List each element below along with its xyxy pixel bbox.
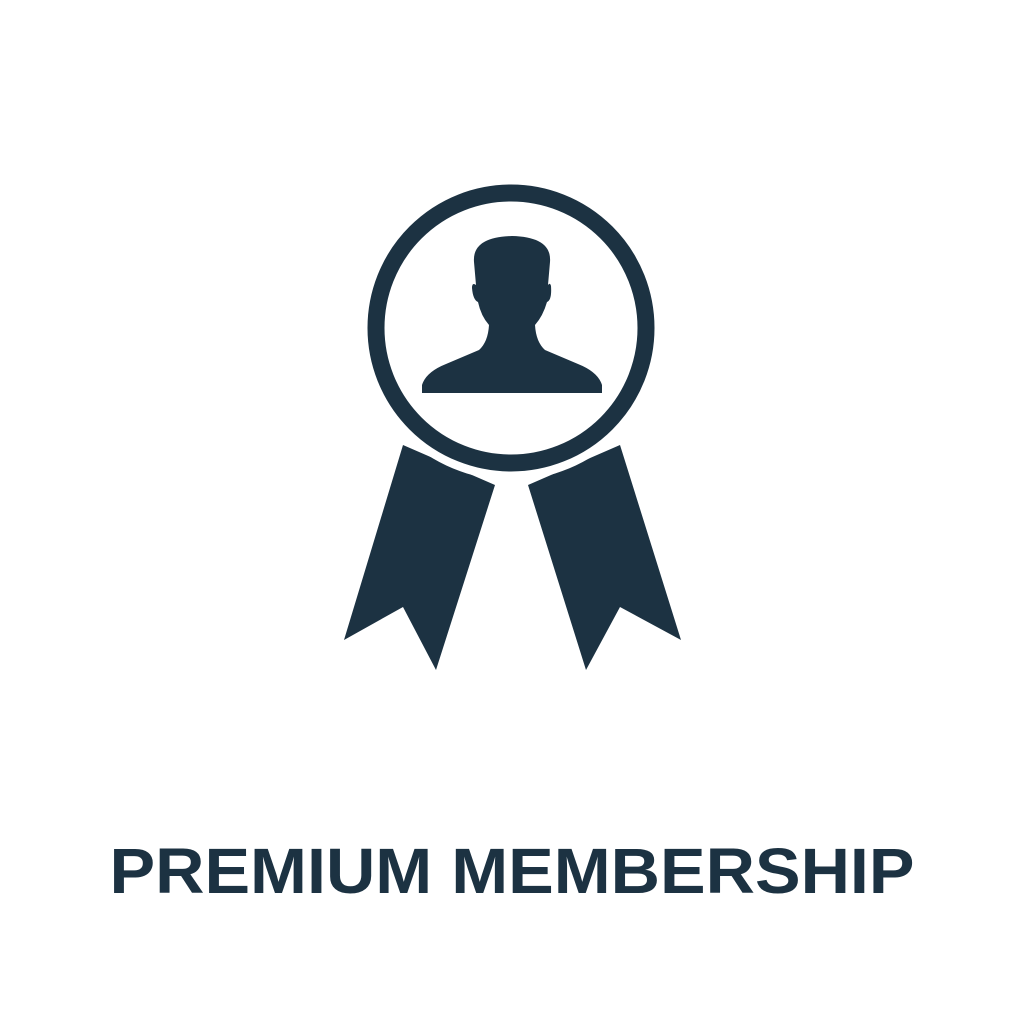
icon: premium membership badge xyxy=(344,176,681,670)
medal circle xyxy=(359,176,663,480)
title: PREMIUM MEMBERSHIP xyxy=(110,835,914,907)
ribbon: right xyxy=(528,445,681,670)
icon: person silhouette xyxy=(422,236,602,393)
ribbon: left xyxy=(344,445,495,670)
medal ring xyxy=(376,193,646,463)
